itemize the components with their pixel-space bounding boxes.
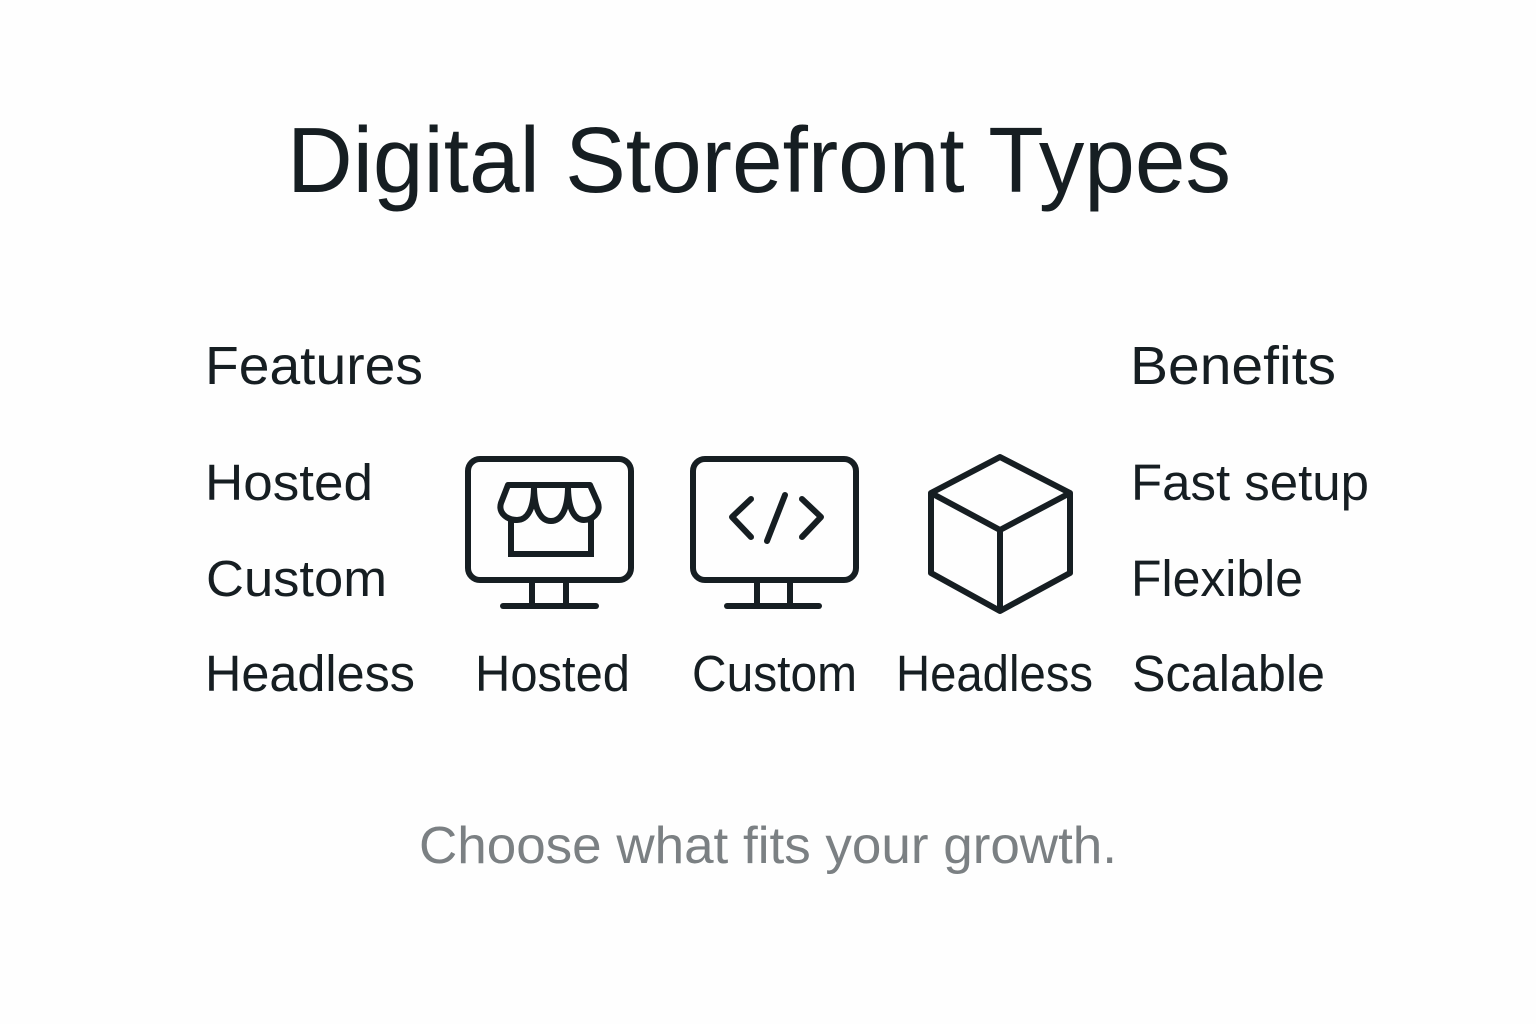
features column [205, 336, 423, 702]
benefit: scalable: Scalable [1132, 645, 1325, 702]
benefit: fast setup: Fast setup [1131, 454, 1369, 511]
icon: headless cube [931, 457, 1070, 611]
benefit: flexible: Flexible [1131, 550, 1303, 607]
label: custom: Custom [692, 645, 857, 702]
benefits column [1130, 336, 1369, 702]
features heading: Features [205, 336, 423, 396]
feature: custom: Custom [206, 550, 387, 607]
icon: custom code monitor [693, 459, 856, 606]
icon: hosted storefront monitor [468, 459, 631, 606]
label: hosted: Hosted [475, 645, 630, 702]
feature: hosted: Hosted [205, 454, 373, 511]
label: headless: Headless [896, 645, 1093, 702]
benefits heading: Benefits [1130, 336, 1336, 396]
tagline: Choose what fits your growth. [419, 817, 1117, 875]
feature: headless: Headless [205, 645, 415, 702]
title: Digital Storefront Types [287, 108, 1231, 212]
